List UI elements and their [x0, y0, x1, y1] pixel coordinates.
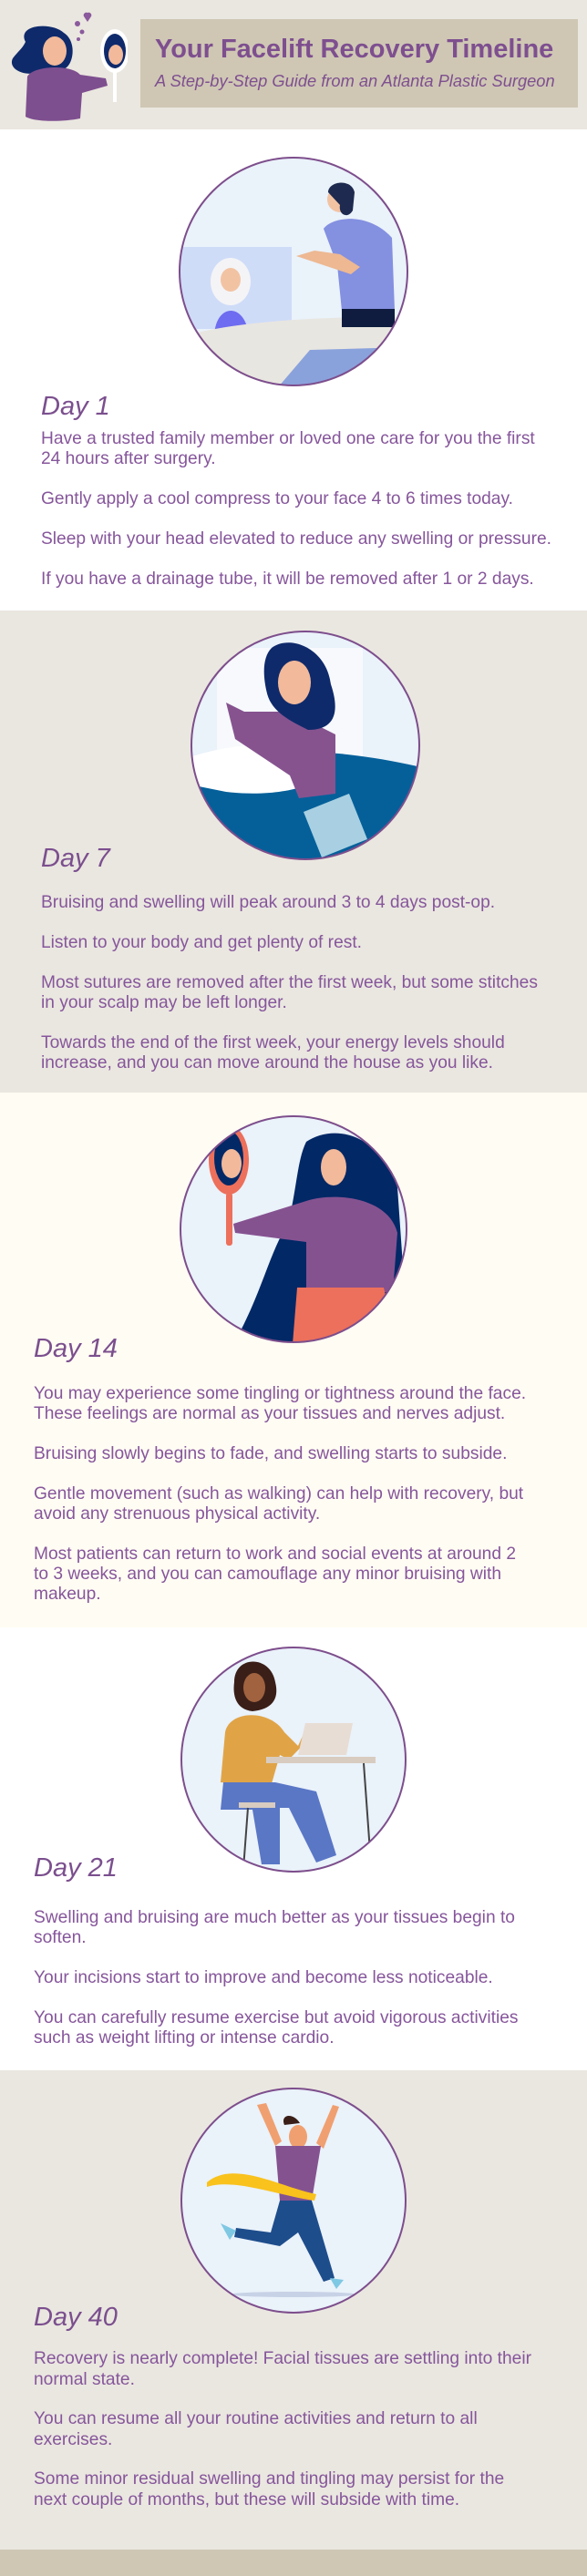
text: day 14: You may experience some tingling or tightness around the face. — [34, 1384, 526, 1403]
icon: woman with mirror — [11, 13, 128, 121]
text: day 7 — [41, 893, 538, 1072]
illustration: woman at desk — [180, 1647, 407, 1873]
panel: day 14 — [0, 1093, 587, 1627]
panel: day 40 — [0, 2070, 587, 2550]
illustration: woman crossing finish line — [180, 2088, 407, 2314]
illustration: woman resting in bed — [191, 631, 420, 860]
illustration: woman with hand mirror — [180, 1115, 407, 1343]
text: day 1: Gently apply a cool compress to your face 4 to 6 times today. — [41, 489, 513, 508]
text: day 40: next couple of months, but these will subside with time. — [34, 2489, 459, 2509]
text: day 21: Your incisions start to improve and become less noticeable. — [34, 1968, 493, 1987]
text: day 1 — [41, 429, 551, 589]
text: day 14: to 3 weeks, and you can camouflage any minor bruising with — [34, 1565, 501, 1584]
title: Your Facelift Recovery Timeline — [155, 35, 553, 64]
text: day 14: Most patients can return to work and social events at around 2 — [34, 1545, 516, 1564]
title box — [140, 19, 578, 108]
text: day 40: normal state. — [34, 2369, 135, 2389]
text: day 21 — [34, 1908, 518, 2047]
text: day 7: Towards the end of the first week, your energy levels should — [41, 1033, 505, 1052]
text: day 1: 24 hours after surgery. — [41, 449, 216, 468]
text: day 40 — [34, 2349, 531, 2509]
text: day 40: exercises. — [34, 2429, 112, 2449]
text: day 14: makeup. — [34, 1585, 101, 1604]
text: day 7: increase, and you can move around the house as you like. — [41, 1053, 493, 1072]
heading: day 14: Day 14 — [34, 1334, 118, 1363]
text: day 7: Listen to your body and get plenty of rest. — [41, 933, 362, 952]
heading: day 7: Day 7 — [41, 844, 110, 873]
text: day 40: You can resume all your routine activities and return to all — [34, 2409, 478, 2428]
heading: day 40: Day 40 — [34, 2303, 118, 2332]
text: day 14: Gentle movement (such as walking) can help with recovery, but — [34, 1484, 523, 1504]
text: day 21: soften. — [34, 1928, 87, 1947]
panel: day 1 — [42, 157, 551, 588]
text: day 21: such as weight lifting or intense cardio. — [34, 2028, 335, 2047]
subtitle: A Step-by-Step Guide from an Atlanta Plastic Surgeon — [155, 71, 555, 90]
text: day 7: in your scalp may be left longer. — [41, 993, 287, 1012]
text: day 14: Bruising slowly begins to fade, and swelling starts to subside. — [34, 1444, 507, 1463]
header band — [0, 0, 587, 129]
text: day 7: Bruising and swelling will peak around 3 to 4 days post-op. — [41, 893, 495, 912]
text: day 40: Some minor residual swelling and tingling may persist for the — [34, 2469, 504, 2489]
text: day 1: If you have a drainage tube, it will be removed after 1 or 2 days. — [41, 570, 534, 589]
footer band — [0, 2550, 587, 2576]
text: day 14: These feelings are normal as your tissues and nerves adjust. — [34, 1404, 505, 1423]
text: day 40: Recovery is nearly complete! Facial tissues are settling into their — [34, 2349, 531, 2368]
panel: day 21 — [35, 1647, 518, 2047]
text: day 1: Have a trusted family member or loved one care for you the first — [41, 429, 535, 448]
text: day 21: You can carefully resume exercise but avoid vigorous activities — [34, 2008, 518, 2027]
text: day 14 — [34, 1384, 526, 1604]
text: day 14: avoid any strenuous physical activity. — [34, 1504, 320, 1524]
text: day 21: Swelling and bruising are much better as your tissues begin to — [34, 1908, 515, 1927]
text: day 1: Sleep with your head elevated to reduce any swelling or pressure. — [41, 529, 551, 549]
heading: day 21: Day 21 — [34, 1853, 118, 1883]
heading: day 1: Day 1 — [41, 392, 110, 421]
illustration: caregiver and patient — [179, 157, 408, 386]
text: day 7: Most sutures are removed after the first week, but some stitches — [41, 973, 538, 992]
panel: day 7 — [0, 611, 587, 1093]
